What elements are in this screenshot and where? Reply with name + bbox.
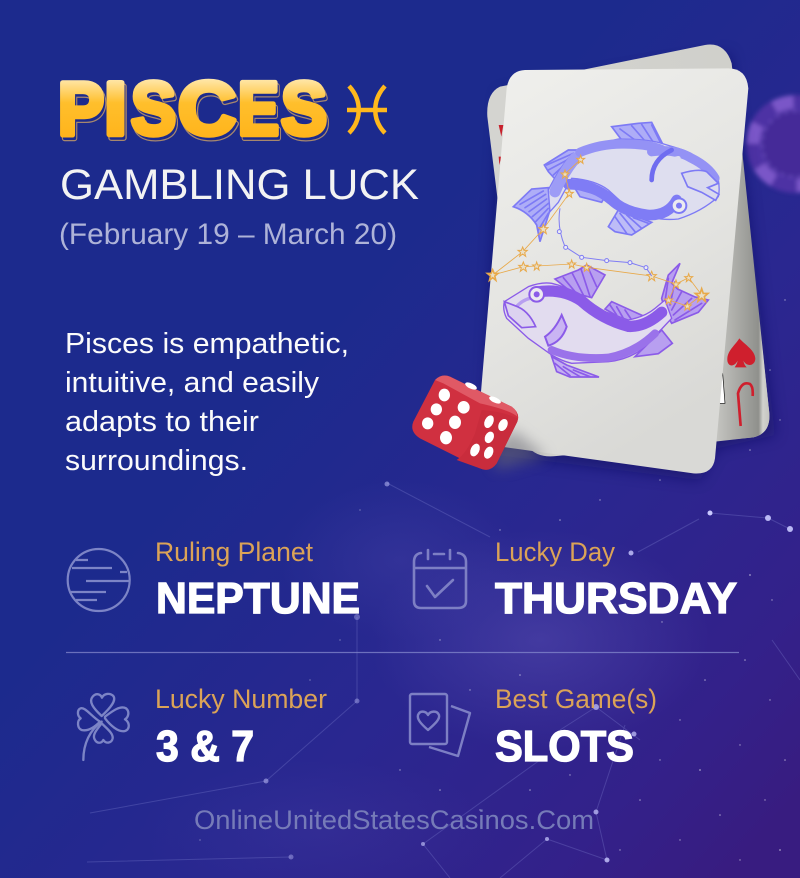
panel: lucky number [78, 684, 327, 771]
title: PISCES [58, 66, 329, 154]
title shadow layer: C [180, 70, 238, 154]
title shadow layer: P [60, 70, 106, 154]
title gold layer: P [58, 66, 104, 150]
title shadow inner layer: P [60, 70, 106, 154]
label: best games: Best Game(s) [495, 684, 657, 714]
date range: (February 19 – March 20) [59, 218, 397, 251]
fish eye [672, 198, 686, 213]
value: thursday: THURSDAY [495, 574, 737, 623]
fish mouth [682, 170, 719, 200]
title shadow layer: S [133, 70, 178, 154]
title gold layer: C [178, 66, 236, 150]
value: slots: SLOTS [495, 722, 634, 771]
constellation [487, 155, 708, 310]
footer: site name: OnlineUnitedStatesCasinos.Com [194, 805, 594, 835]
icon: calendar [414, 550, 466, 608]
heading: gambling luck: GAMBLING LUCK [60, 161, 419, 209]
icon: planet [68, 549, 130, 611]
card pip: heart [727, 338, 755, 367]
fish fins [513, 122, 662, 242]
icon: clover [78, 694, 129, 760]
description text: adapts to their [65, 406, 259, 438]
title shadow layer: S [283, 70, 329, 154]
fish shading bands [568, 184, 677, 215]
description text: intuitive, and easily [65, 367, 320, 399]
divider [66, 652, 739, 654]
title shadow layer: I [106, 70, 129, 154]
panel: lucky day [414, 537, 737, 623]
illustration: top fish [513, 122, 719, 242]
fish body [548, 139, 719, 219]
title shadow inner layer: E [240, 70, 281, 154]
fish mouth [504, 302, 536, 328]
title shadow inner layer: C [180, 70, 238, 154]
title gold layer: E [238, 66, 279, 150]
description text: surroundings. [65, 445, 248, 477]
description text: Pisces is empathetic, [65, 328, 349, 360]
icon: poker chip [746, 95, 800, 193]
title gold layer: S [281, 66, 327, 150]
icon: cards [410, 694, 470, 756]
description text [65, 328, 349, 477]
card: back [487, 45, 769, 456]
value: 3 and 7: 3 & 7 [156, 722, 254, 771]
title shadow inner layer [60, 70, 329, 154]
label: lucky number: Lucky Number [155, 684, 327, 714]
title shadow inner layer: S [133, 70, 178, 154]
panel: ruling planet [68, 537, 360, 623]
fish eye [529, 287, 544, 302]
icon: pisces symbol [347, 86, 387, 133]
label: lucky day: Lucky Day [495, 537, 615, 567]
card: front [478, 68, 748, 473]
fish body [504, 283, 672, 363]
value: neptune: NEPTUNE [156, 574, 360, 623]
shadow of cards [483, 53, 775, 480]
title gold layer [58, 66, 327, 150]
icon: red die [412, 376, 547, 470]
card letter: J [738, 383, 753, 426]
fish shading bands [535, 291, 662, 326]
fish fins [552, 263, 708, 377]
title shadow inner layer: I [106, 70, 129, 154]
playing cards [478, 45, 775, 480]
illustration: bottom fish [504, 263, 708, 377]
constellation link: violet stars [557, 208, 652, 276]
title shadow inner layer: S [283, 70, 329, 154]
title gold layer: I [104, 66, 127, 150]
panel: best games [410, 684, 657, 771]
label: ruling planet: Ruling Planet [155, 537, 313, 567]
title shadow layer [60, 70, 329, 154]
title shadow layer: E [240, 70, 281, 154]
title gold layer: S [131, 66, 176, 150]
